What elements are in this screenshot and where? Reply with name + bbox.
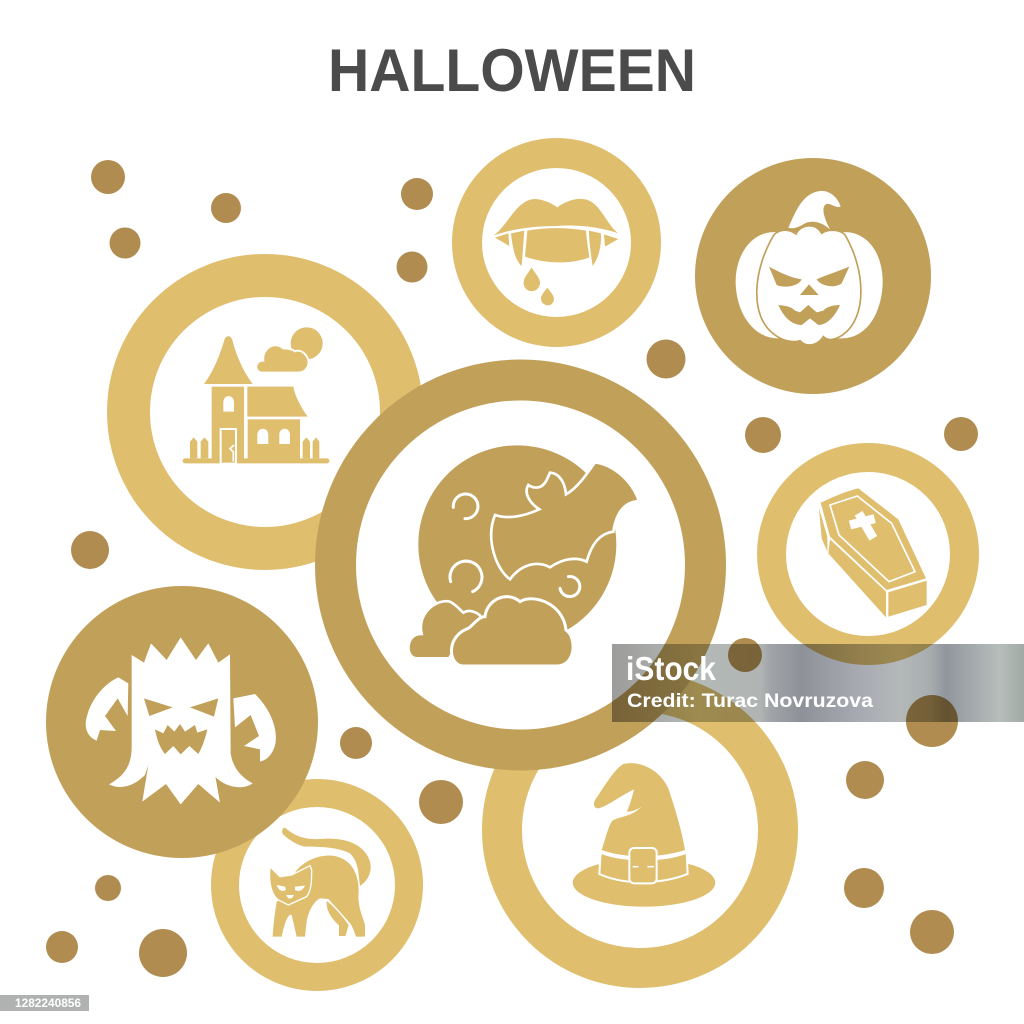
watermark credit: Credit: Turac Novruzova [627,691,873,712]
image id tag [0,995,89,1011]
badge: tree monster [46,586,318,858]
watermark banner [612,644,1024,722]
ring: cat [225,793,409,977]
ring: witch hat [502,692,778,968]
icon: vampire mouth [493,199,618,305]
image id tag: 1282240856 [15,998,81,1010]
icon: coffin [819,488,927,617]
icon: moon, bat and clouds [408,445,639,666]
icon: jack-o-lantern [736,191,883,345]
ring: vampire lips [467,153,646,332]
icon: black cat [270,828,371,937]
icon: haunted house [183,327,329,464]
ring: haunted house [128,276,402,548]
icon: tree monster [86,637,276,804]
decorative dots [46,160,978,977]
title: HALLOWEEN [328,37,696,104]
watermark logo: iStock [626,650,717,687]
ring: coffin [772,458,964,650]
icon: witch hat [573,763,715,907]
ring: moon centre [336,380,706,750]
badge: pumpkin [695,158,931,394]
